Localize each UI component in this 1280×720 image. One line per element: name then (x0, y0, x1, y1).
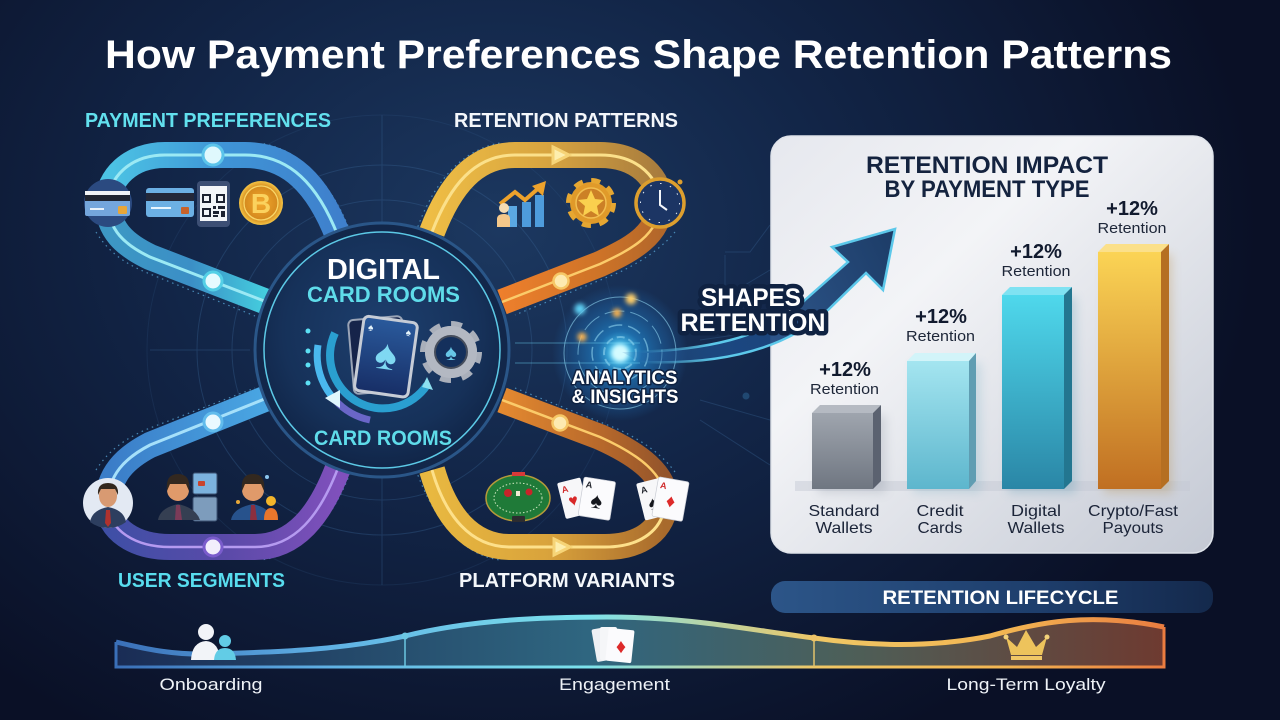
lifecycle heading: RETENTION LIFECYCLE (882, 588, 1118, 609)
icon: playing cards: ♠ (367, 322, 375, 334)
title: How Payment Preferences Shape Retention Patterns (105, 33, 1172, 77)
chart baseline (795, 481, 1190, 491)
bar: credit cards: Credit (916, 503, 964, 520)
hub subtitle: CARD ROOMS (307, 282, 460, 307)
icon: playing cards fanned (636, 477, 689, 521)
heading: platform variants: PLATFORM VARIANTS (459, 570, 675, 592)
hub caption: CARD ROOMS (314, 427, 452, 450)
lifecycle label: engagement: Engagement (559, 675, 670, 694)
bar: crypto and fast payouts: Payouts (1102, 520, 1164, 537)
label: analytics and insights: ANALYTICS (572, 368, 678, 389)
lifecycle label: onboarding: Onboarding (160, 675, 262, 694)
bar: crypto and fast payouts: Crypto/Fast (1088, 503, 1179, 520)
icon: playing cards fanned: A (659, 480, 668, 491)
heading: retention patterns: RETENTION PATTERNS (454, 110, 678, 132)
bar: digital wallets (1002, 241, 1076, 537)
chart title (866, 152, 1108, 203)
label: shapes retention (680, 284, 826, 337)
icon: playing cards pair (557, 477, 616, 520)
heading: user segments: USER SEGMENTS (118, 570, 285, 592)
panel: central hub (255, 223, 509, 477)
icon: playing cards pair: ♠ (589, 487, 605, 514)
label: shapes retention: SHAPES (701, 284, 801, 312)
bar: standard wallets: Retention (810, 381, 879, 398)
icon: playing cards pair: A (585, 479, 594, 490)
icon: poker table (486, 472, 550, 522)
lifecycle label: long-term loyalty: Long-Term Loyalty (946, 675, 1106, 694)
chart title: BY PAYMENT TYPE (884, 176, 1090, 203)
icon: gear with star (570, 182, 612, 224)
icon: bitcoin coin (239, 181, 283, 225)
track: user segments (108, 396, 338, 556)
heading: payment preferences: PAYMENT PREFERENCES (85, 110, 331, 132)
icon: person avatar (83, 478, 133, 528)
retention icons (497, 179, 684, 227)
user icons (83, 473, 278, 528)
track: platform variants (432, 400, 665, 555)
payment icons (84, 179, 283, 227)
icon: gear: ♠ (445, 340, 457, 365)
track: payment preferences (108, 145, 338, 304)
bar: credit cards: +12% (915, 306, 967, 328)
bar: crypto and fast payouts: Retention (1098, 220, 1166, 237)
bar: standard wallets: +12% (819, 359, 871, 381)
icon: phone with QR code (197, 181, 230, 227)
background tech rings and lines (147, 115, 770, 585)
bar: digital wallets: Retention (1002, 263, 1070, 280)
analytics orb (515, 285, 690, 421)
icon: playing cards fanned: A (640, 484, 649, 496)
icon: loyalty crown (1004, 630, 1050, 660)
icon: credit card (146, 188, 194, 217)
track: retention patterns (432, 147, 660, 302)
label: analytics and insights: & INSIGHTS (572, 387, 678, 408)
icon: playing cards: ♠ (372, 330, 401, 379)
icon: playing cards pair: A (561, 484, 570, 495)
icon: playing cards pair: ♥ (567, 492, 580, 511)
icon: card in circle (84, 179, 132, 227)
arrow: shapes retention (622, 229, 895, 362)
label: analytics and insights (572, 368, 678, 408)
platform icons (486, 472, 689, 522)
icon: gear (425, 326, 477, 378)
bar: digital wallets: +12% (1010, 241, 1062, 263)
bar: standard wallets: Standard (808, 503, 880, 520)
bar: digital wallets: Digital (1011, 503, 1061, 520)
bar: crypto and fast payouts (1088, 198, 1179, 537)
bar: credit cards (906, 306, 981, 537)
icon: playing cards fanned: ♠ (646, 492, 661, 514)
icon: onboarding people (191, 624, 236, 660)
hub title: DIGITAL (327, 254, 440, 286)
bar: credit cards: Retention (906, 328, 975, 345)
lifecycle heading (771, 581, 1213, 613)
bar: credit cards: Cards (918, 520, 962, 537)
icon: playing cards (348, 316, 418, 398)
bar: crypto and fast payouts: +12% (1106, 198, 1158, 220)
icon: person with token (231, 474, 278, 520)
icon: engagement cards: ♦ (616, 636, 626, 658)
chart title: RETENTION IMPACT (866, 152, 1108, 179)
bar: standard wallets: Wallets (816, 520, 872, 537)
bar: standard wallets (808, 359, 886, 537)
icon: growth chart (497, 181, 546, 227)
track dotted edges (96, 143, 675, 560)
hub arcs (305, 328, 433, 420)
label: shapes retention: RETENTION (680, 309, 826, 337)
icon: person with screens (158, 473, 217, 521)
icon: playing cards fanned: ♦ (664, 490, 677, 512)
icon: playing cards: ♠ (405, 328, 412, 339)
icon: clock (636, 179, 684, 227)
icon: bitcoin coin: B (251, 188, 271, 219)
icon: engagement cards (591, 627, 635, 663)
bar: digital wallets: Wallets (1008, 520, 1064, 537)
lifecycle wave chart (116, 617, 1164, 667)
panel: retention impact chart (771, 136, 1213, 553)
